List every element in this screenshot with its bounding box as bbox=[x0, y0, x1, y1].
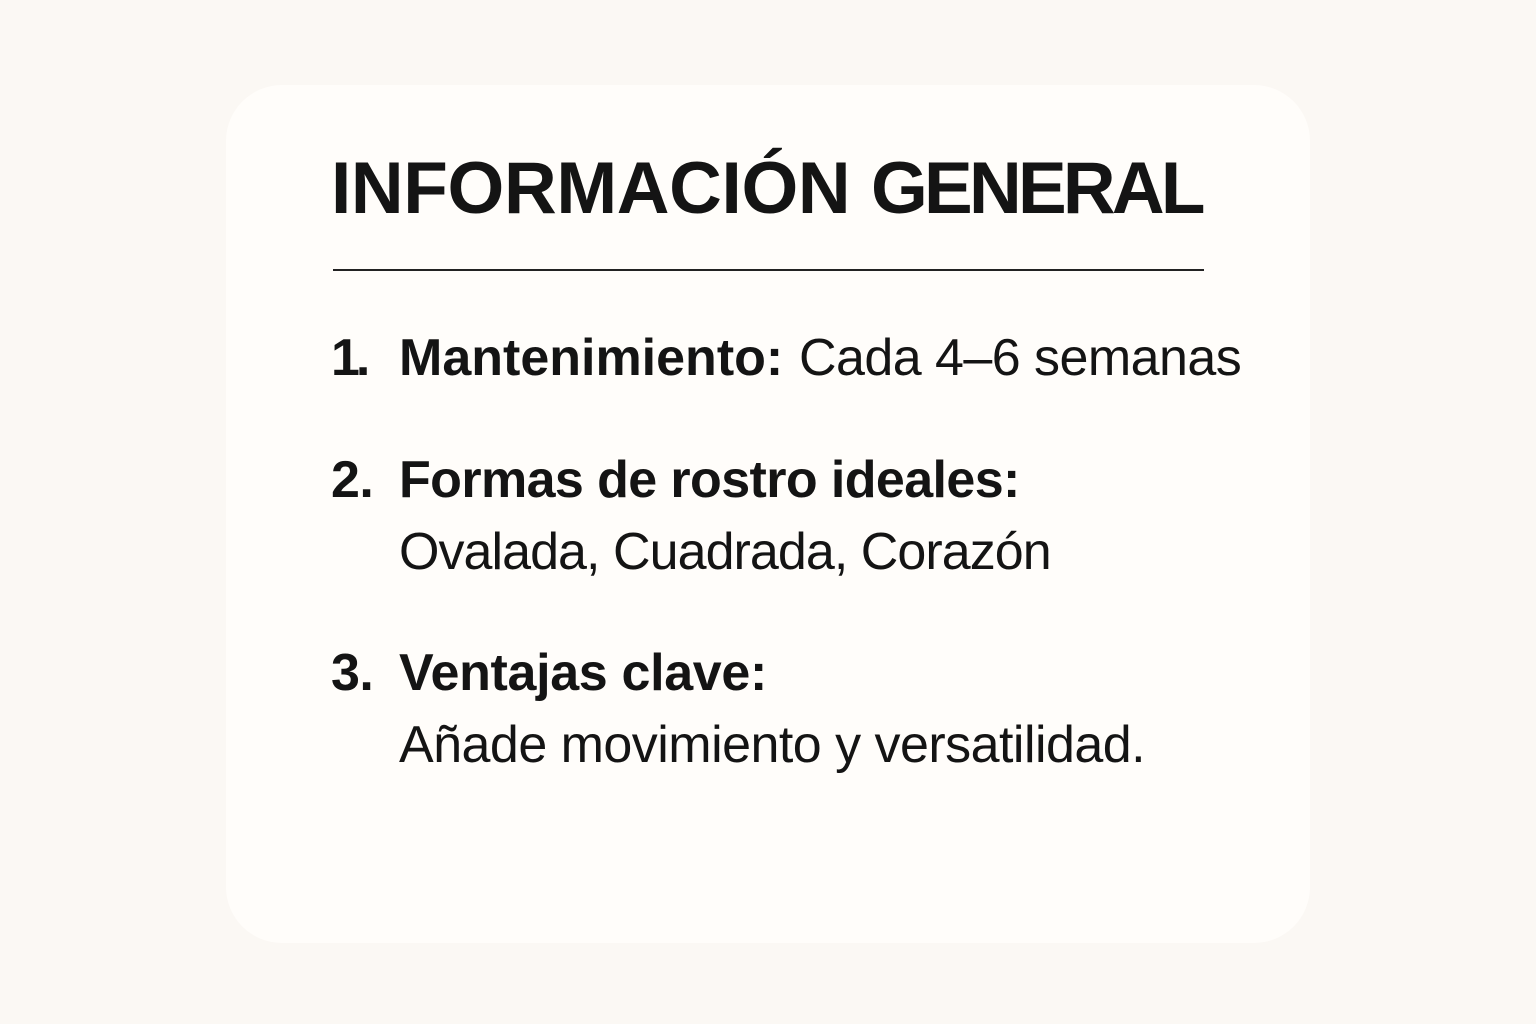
list item 2: face shapes: Ovalada, Cuadrada, Corazón bbox=[399, 523, 1051, 581]
list item 2: face shapes: 2. bbox=[331, 451, 373, 509]
list item 1: maintenance: Cada 4–6 semanas bbox=[799, 329, 1241, 387]
panel: information card bbox=[226, 85, 1310, 943]
heading bbox=[331, 148, 1204, 229]
list item 2: face shapes: Formas de rostro ideales: bbox=[399, 451, 1020, 509]
divider line bbox=[333, 269, 1204, 271]
list item 3: key advantages bbox=[331, 644, 1145, 774]
list item 1: maintenance: 1. bbox=[331, 329, 366, 387]
heading: GENERAL bbox=[871, 148, 1202, 229]
list item 2: face shapes bbox=[331, 451, 1051, 581]
heading: INFORMACIÓN bbox=[331, 148, 850, 229]
list item 1: maintenance: Mantenimiento: bbox=[399, 329, 783, 387]
list item 3: key advantages: Ventajas clave: bbox=[399, 644, 767, 702]
list item 1: maintenance bbox=[331, 329, 1241, 387]
list item 3: key advantages: Añade movimiento y versatilidad. bbox=[399, 716, 1145, 774]
list item 3: key advantages: 3. bbox=[331, 644, 373, 702]
